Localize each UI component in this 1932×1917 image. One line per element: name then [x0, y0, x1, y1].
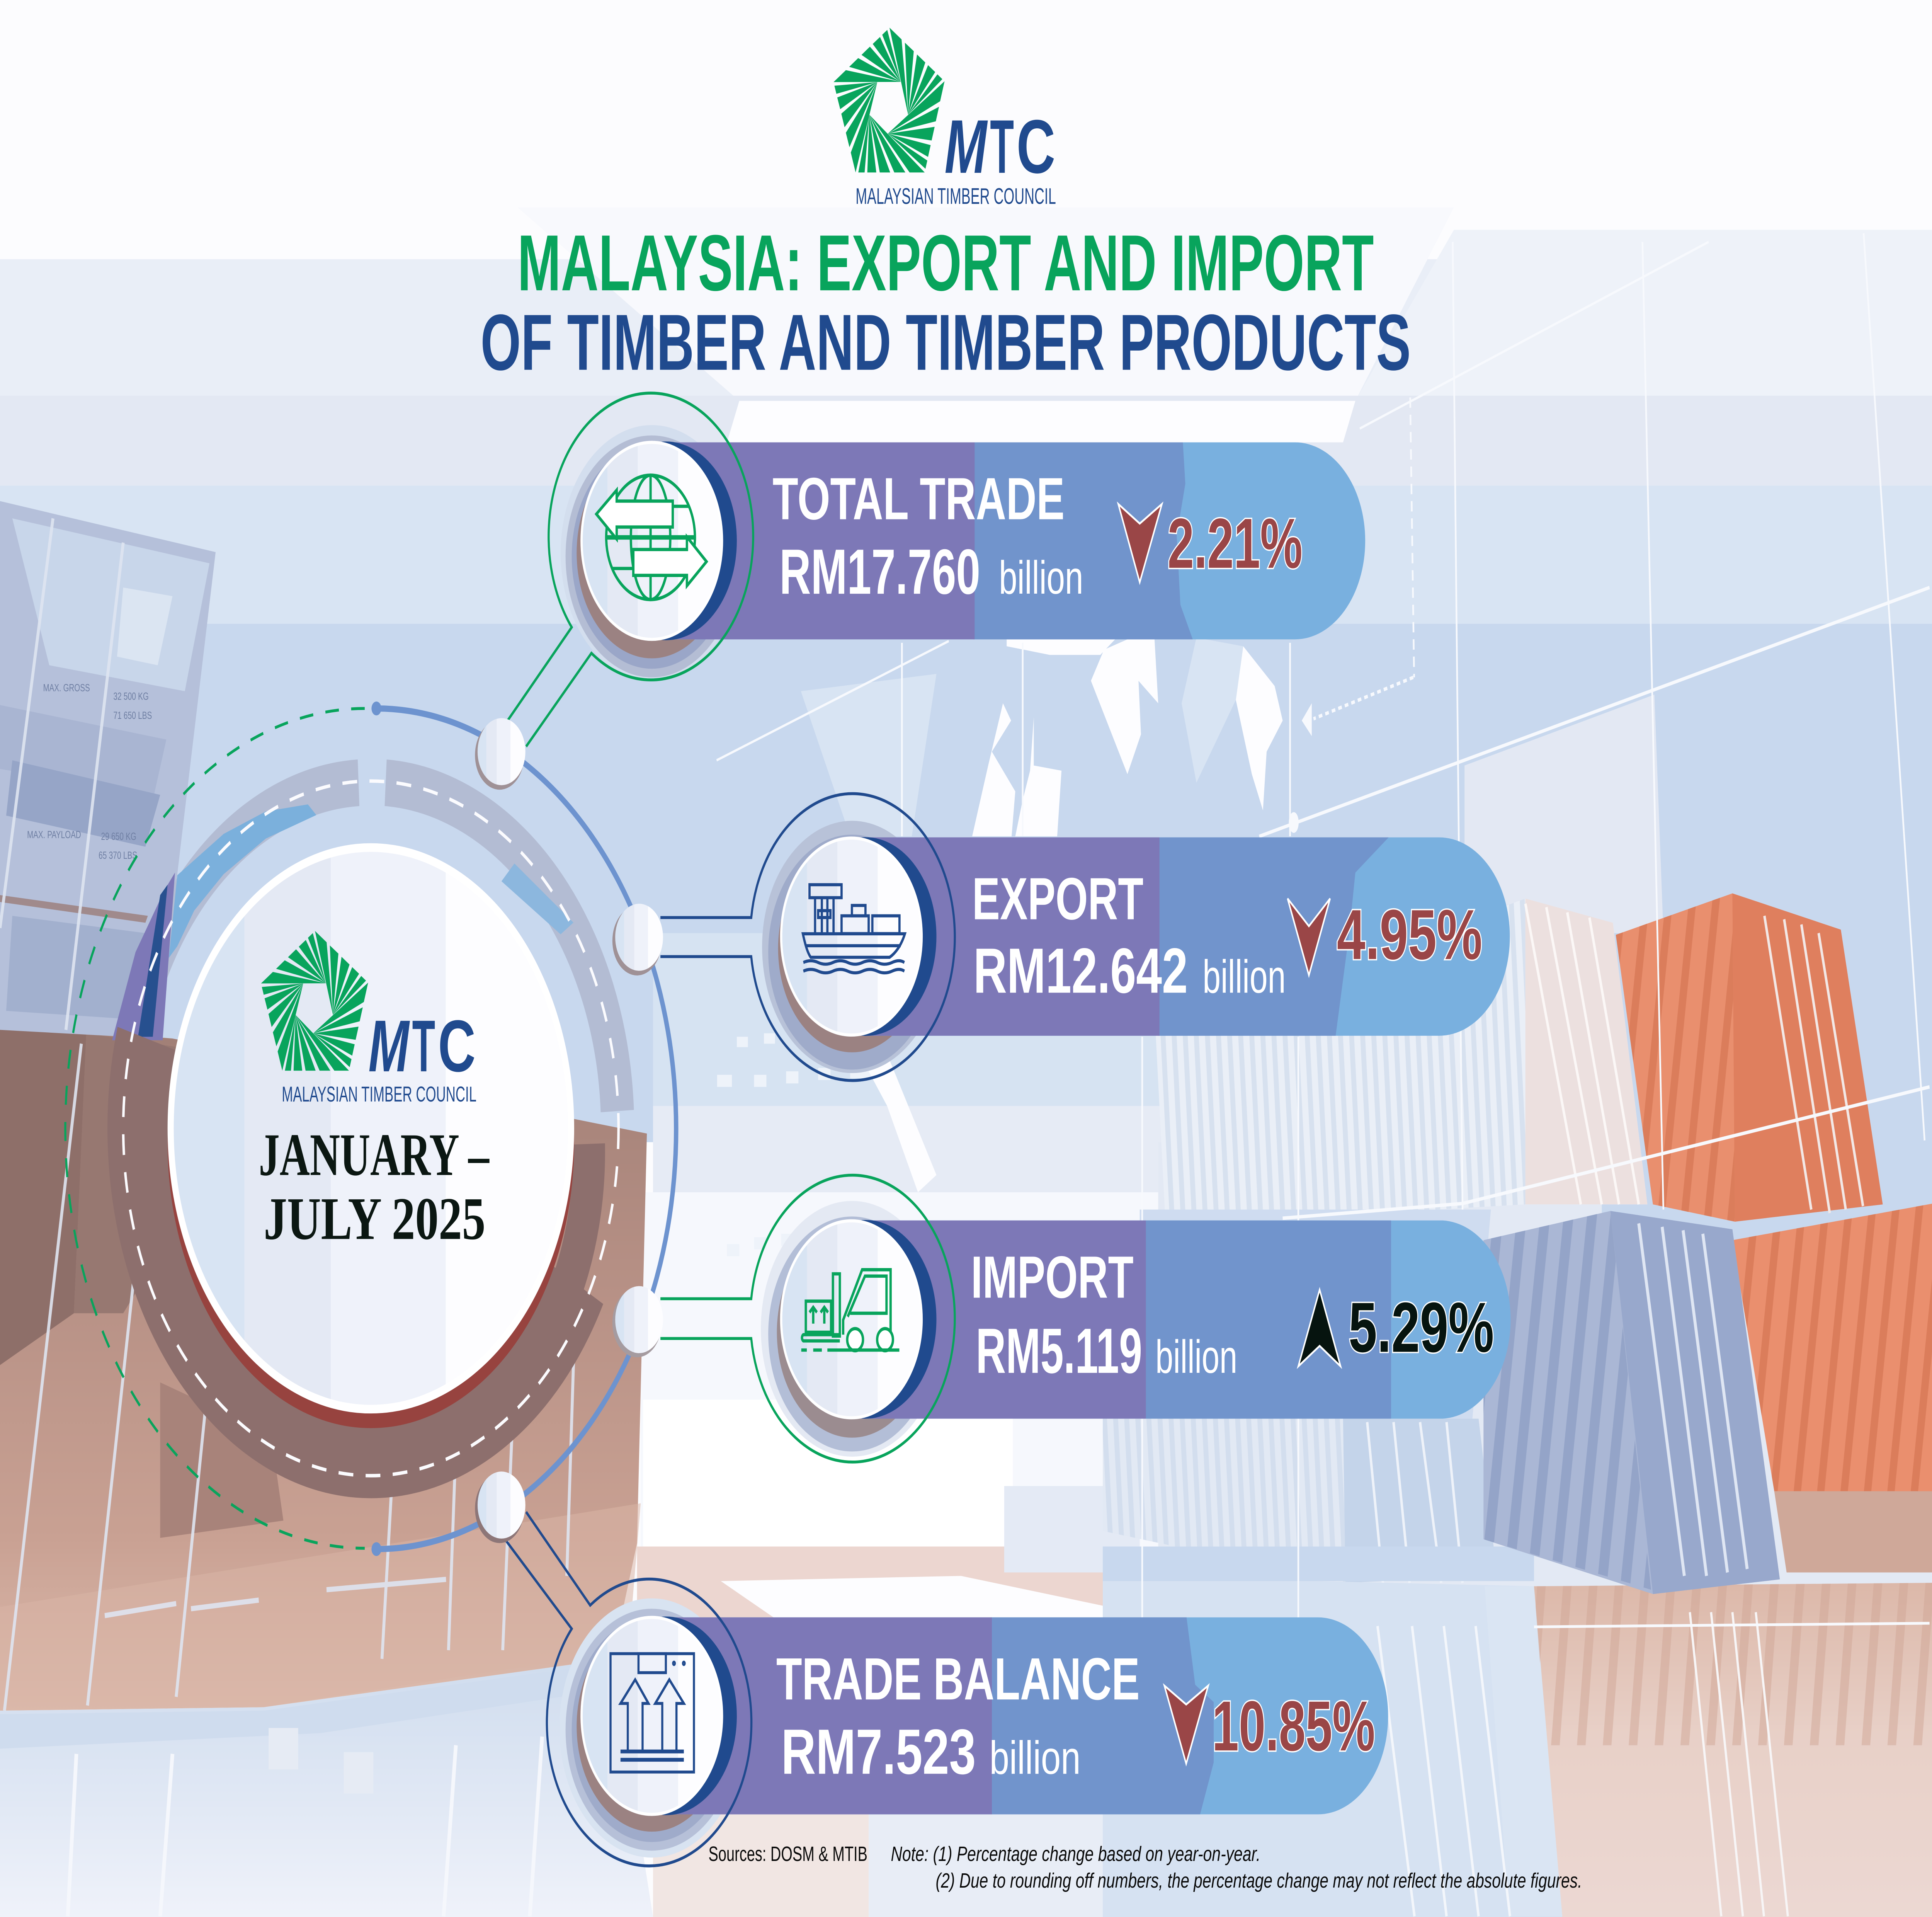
- footnotes: (2) Due to rounding off numbers, the percentage change may not reflect the absolute figures.: [936, 1869, 1582, 1892]
- pill: [856, 838, 1510, 1036]
- blue container: [1483, 1211, 1780, 1594]
- change: 10.85%: [1212, 1686, 1375, 1765]
- footnotes: Sources: DOSM & MTIB: [709, 1842, 867, 1866]
- crescent: [595, 1617, 737, 1815]
- icon shadow: [561, 425, 743, 681]
- title: OF TIMBER AND TIMBER PRODUCTS: [481, 298, 1411, 387]
- lower dark ring: [138, 1039, 577, 1456]
- world map shapes in white: [727, 401, 1355, 1192]
- value: RM12.642: [973, 935, 1188, 1006]
- value: [781, 1716, 1081, 1788]
- upper-left pale container: [0, 501, 216, 1039]
- right tail of the dark ring: [567, 1144, 589, 1287]
- value: RM7.523: [781, 1716, 976, 1788]
- logo: Malaysian Timber Council (top): T: [990, 104, 1014, 189]
- logo: Malaysian Timber Council (top): [833, 28, 1056, 209]
- orange containers: [1732, 1204, 1932, 1569]
- crescent: [595, 441, 737, 640]
- white dashed ring: [123, 781, 619, 1476]
- label: TRADE BALANCE: [776, 1646, 1140, 1713]
- change: 4.95%: [1337, 895, 1482, 974]
- brown container: [0, 1025, 647, 1711]
- background: container yard photo: MAX. GROSS: [43, 682, 90, 693]
- blue sections of the ring: [169, 804, 573, 958]
- panel: export: [660, 793, 1510, 1081]
- pill: [653, 1617, 1388, 1814]
- title: MALAYSIA: EXPORT AND IMPORT: [517, 218, 1374, 307]
- logo inside the disc: [261, 931, 476, 1107]
- value: [973, 935, 1286, 1006]
- background: container yard photo: MAX. PAYLOAD: [27, 829, 81, 840]
- icon disc: [582, 1617, 722, 1814]
- icon: globe with arrows: [596, 475, 706, 599]
- icon shadow: [762, 821, 942, 1073]
- dotted city lights: [717, 1030, 887, 1256]
- change: 5.29%: [1349, 1288, 1494, 1367]
- dark red shadow under the disc: [168, 858, 574, 1428]
- peach container at bottom right: [1534, 1583, 1932, 1917]
- icon disc: [781, 838, 922, 1035]
- crescent: [795, 1220, 936, 1419]
- value: [976, 1316, 1237, 1387]
- connector nodes: [475, 718, 663, 1543]
- blue outer arc: [371, 701, 676, 1556]
- logo: Malaysian Timber Council (top): C: [1017, 104, 1055, 189]
- panel: total trade: [507, 393, 1365, 746]
- label: TOTAL TRADE: [772, 466, 1065, 532]
- ring with connector: [660, 1175, 955, 1462]
- door poles on the brown container: [0, 518, 580, 1711]
- value: RM5.119: [976, 1316, 1142, 1387]
- value: billion: [1155, 1331, 1237, 1383]
- pill: [653, 443, 1365, 639]
- logo inside the disc: T: [412, 1005, 435, 1087]
- crescent: [795, 837, 936, 1036]
- translucent upper ring: [132, 783, 617, 1111]
- icon shadow: [761, 1201, 943, 1457]
- logo: Malaysian Timber Council (top): M: [945, 104, 988, 189]
- value: [779, 536, 1083, 608]
- green dashed arc: [65, 708, 365, 1548]
- ring with connector: [504, 1512, 752, 1866]
- value: RM17.760: [779, 536, 980, 608]
- date text: JANUARY –: [259, 1122, 490, 1188]
- value: billion: [1202, 951, 1286, 1003]
- background: container yard photo: 71 650 LBS: [113, 710, 152, 721]
- icon: cargo ship: [803, 885, 905, 973]
- date text: JULY 2025: [264, 1185, 485, 1252]
- peach ground and white slab: [637, 1546, 1140, 1622]
- icon disc: [781, 1221, 922, 1418]
- logo inside the disc: C: [438, 1005, 476, 1087]
- bottom-left pale containers: [0, 1659, 653, 1917]
- pill: [856, 1221, 1510, 1419]
- icon: this-way-up box: [611, 1654, 694, 1772]
- label: IMPORT: [971, 1244, 1134, 1311]
- icon: forklift: [801, 1270, 899, 1351]
- panel: trade balance: [504, 1512, 1388, 1866]
- date disc: [171, 848, 571, 1409]
- change: 2.21%: [1168, 504, 1303, 583]
- logo inside the disc: M: [368, 1005, 410, 1087]
- footnotes: [709, 1842, 1582, 1892]
- title: [481, 218, 1411, 387]
- value: billion: [999, 552, 1083, 604]
- central date dial: [112, 781, 619, 1476]
- value: billion: [990, 1732, 1081, 1784]
- overlay white lines: [717, 233, 1930, 1728]
- icon disc: [582, 443, 722, 639]
- logo inside the disc: MALAYSIAN TIMBER COUNCIL: [282, 1083, 476, 1107]
- ring with connector: [507, 393, 753, 746]
- footnotes: Note: (1) Percentage change based on year-on-year.: [891, 1842, 1260, 1866]
- logo: Malaysian Timber Council (top): MALAYSIAN TIMBER COUNCIL: [855, 184, 1056, 209]
- white stacked containers: [1156, 899, 1647, 1225]
- panel: import: [660, 1175, 1510, 1462]
- icon shadow: [560, 1599, 744, 1857]
- ring with connector: [660, 793, 955, 1081]
- date text: [259, 1122, 490, 1252]
- purple patch on the ring: [112, 873, 175, 1040]
- background: container yard photo: 65 370 LBS: [99, 850, 137, 861]
- label: EXPORT: [972, 866, 1143, 932]
- background: container yard photo: 29 650 KG: [101, 831, 136, 842]
- background: container yard photo: 32 500 KG: [113, 691, 149, 702]
